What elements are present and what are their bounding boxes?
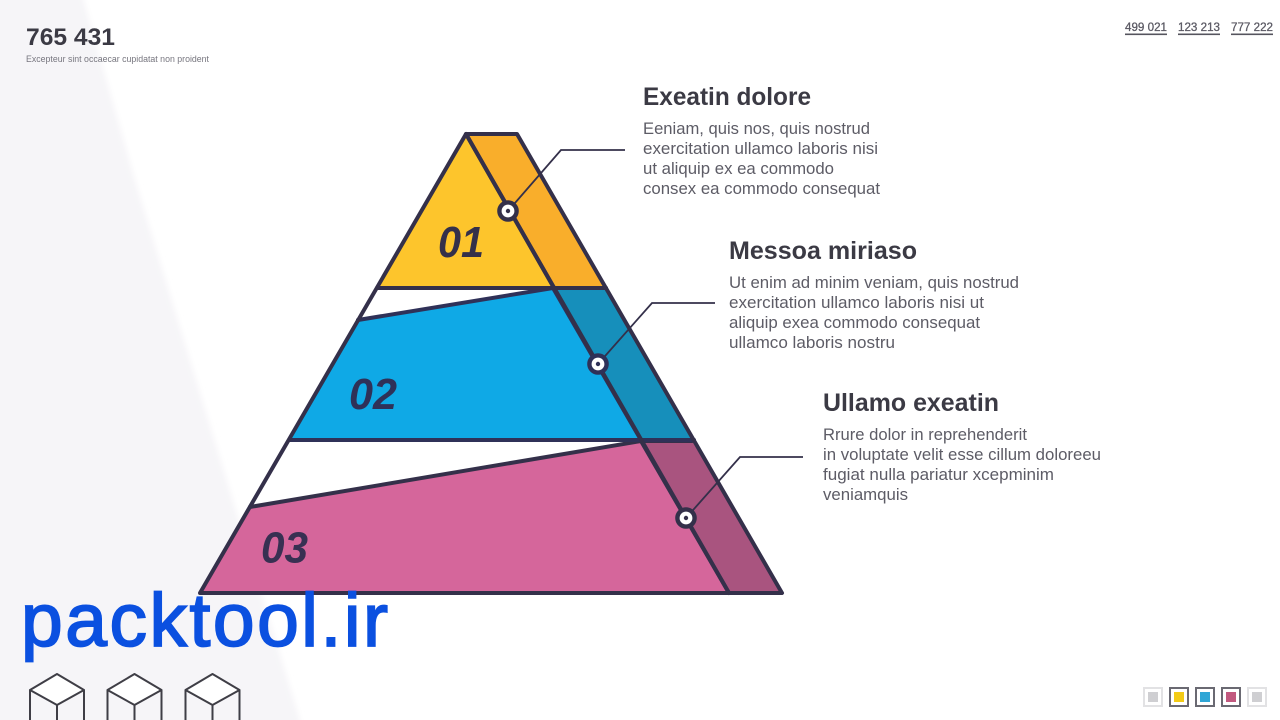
body: aliquip exea commodo consequat xyxy=(729,314,980,332)
navigation squares xyxy=(1144,688,1266,706)
heading: Messoa miriaso xyxy=(729,237,917,265)
text block: Messoa miriaso xyxy=(729,237,1019,352)
callout 3: connector and marker xyxy=(677,457,803,527)
header: top right statistics xyxy=(1125,20,1273,35)
header: top right statistics: 123 213 xyxy=(1178,20,1220,34)
body xyxy=(729,274,1019,352)
subtitle: Excepteur sint occaecar cupidatat non proident xyxy=(26,54,209,64)
header: top right statistics: 499 021 xyxy=(1125,20,1167,34)
body: exercitation ullamco laboris nisi xyxy=(643,140,878,158)
body: veniamquis xyxy=(823,486,908,504)
header: top right statistics: 777 222 xyxy=(1231,20,1273,34)
icon: cube 1 xyxy=(30,674,84,720)
callout 1: connector and marker xyxy=(499,150,625,220)
main number: 765 431 xyxy=(26,24,115,51)
icon: cube 3 xyxy=(186,674,240,720)
number 01: 01 xyxy=(438,218,484,267)
number 03: 03 xyxy=(261,524,308,572)
body xyxy=(643,120,880,198)
body: Eeniam, quis nos, quis nostrud xyxy=(643,120,870,138)
number 02: 02 xyxy=(349,370,398,419)
watermark: packtool.ir: packtool.ir xyxy=(21,578,388,662)
body: ullamco laboris nostru xyxy=(729,334,895,352)
inner diagonal and outline xyxy=(200,134,782,593)
text block: Ullamo exeatin xyxy=(823,389,1101,504)
callout 2: connector and marker xyxy=(589,303,715,373)
body: ut aliquip ex ea commodo xyxy=(643,160,834,178)
tier 02: blue xyxy=(289,288,694,440)
body: exercitation ullamco laboris nisi ut xyxy=(729,294,984,312)
body: fugiat nulla pariatur xcepminim xyxy=(823,466,1054,484)
body: consex ea commodo consequat xyxy=(643,180,880,198)
header: main figure xyxy=(26,24,209,64)
text block: Exeatin dolore xyxy=(643,83,880,198)
tier 03: pink xyxy=(200,441,782,593)
body: in voluptate velit esse cillum doloreeu xyxy=(823,446,1101,464)
pyramid chart xyxy=(200,134,782,593)
body xyxy=(823,426,1101,504)
heading: Ullamo exeatin xyxy=(823,389,999,417)
body: Ut enim ad minim veniam, quis nostrud xyxy=(729,274,1019,292)
body: Rrure dolor in reprehenderit xyxy=(823,426,1027,444)
icon: cube 2 xyxy=(108,674,162,720)
icons: three cubes xyxy=(30,674,240,720)
heading: Exeatin dolore xyxy=(643,83,811,111)
tier 01: yellow xyxy=(377,134,606,288)
